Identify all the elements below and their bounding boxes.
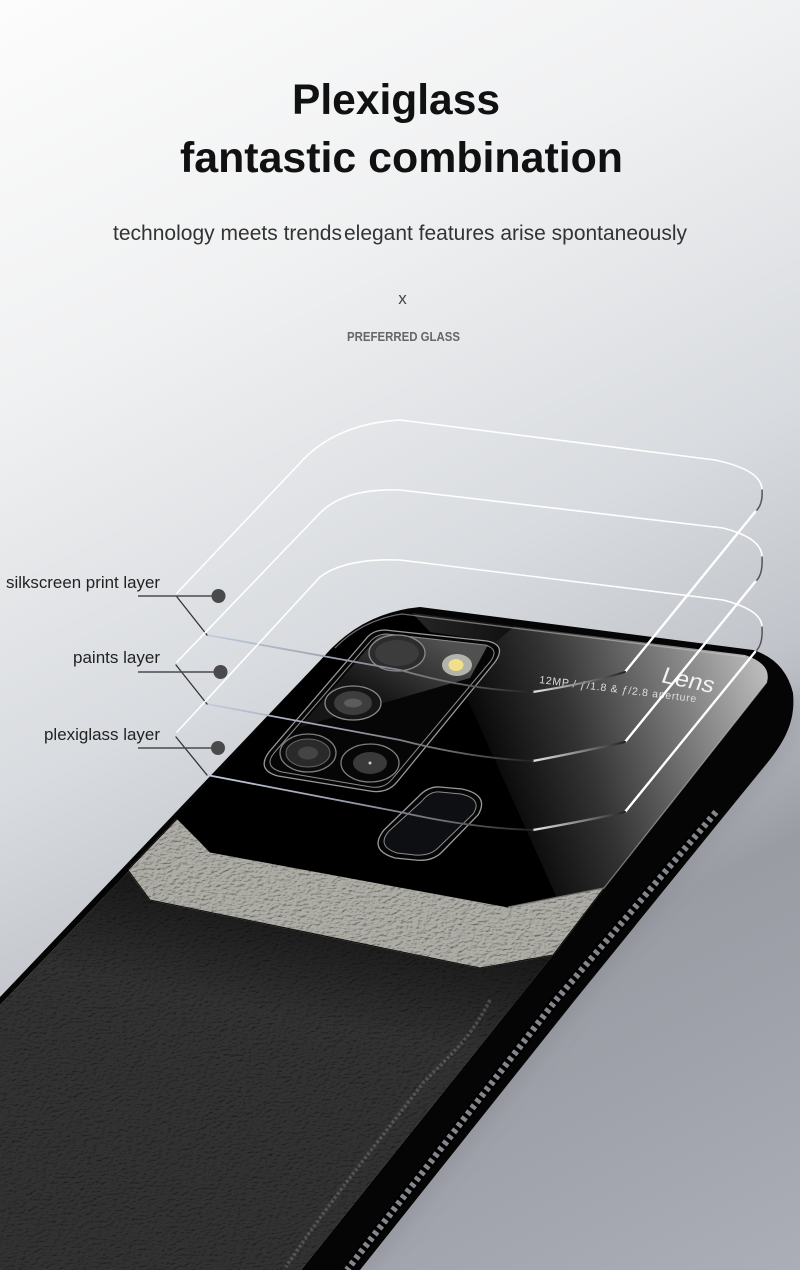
pane: plexiglass layer bbox=[176, 560, 762, 830]
callout: paints layer bbox=[73, 648, 228, 679]
pane: silkscreen print layer bbox=[177, 420, 762, 692]
title: fantastic combination bbox=[180, 134, 623, 182]
title bbox=[180, 76, 623, 182]
subtitle: technology meets trends bbox=[113, 221, 342, 245]
camera module bbox=[264, 630, 500, 792]
small caption: preferred glass: PREFERRED GLASS bbox=[347, 330, 460, 344]
case shadow bbox=[360, 693, 793, 1270]
callout: paints layer: paints layer bbox=[73, 648, 160, 667]
fingerprint sensor bbox=[378, 787, 482, 860]
leather back bbox=[0, 872, 553, 1270]
callout: plexiglass layer: plexiglass layer bbox=[44, 725, 160, 744]
callout: plexiglass layer bbox=[44, 725, 225, 755]
title: Plexiglass bbox=[292, 76, 500, 124]
module gloss bbox=[300, 634, 488, 727]
black facet of glass bbox=[176, 612, 556, 907]
subtitle: elegant features arise spontaneously bbox=[344, 221, 687, 245]
callout: silkscreen print layer: silkscreen print layer bbox=[6, 573, 160, 592]
glass rim highlight bbox=[335, 614, 767, 907]
lens 1 bbox=[369, 635, 425, 671]
lens 2 bbox=[325, 686, 381, 720]
phone case bbox=[0, 607, 793, 1270]
lens print: 12MP / ƒ/1.8 & ƒ/2.8 aperture bbox=[539, 674, 697, 705]
lens 4 bbox=[341, 744, 399, 782]
pane: paints layer bbox=[176, 490, 762, 761]
flash bbox=[442, 654, 472, 676]
gray leather band bbox=[128, 818, 604, 968]
side grip dots bbox=[347, 812, 716, 1270]
lens 3 bbox=[280, 734, 336, 772]
top facet of glass bbox=[412, 613, 515, 642]
multiply mark: x bbox=[398, 289, 407, 308]
subtitle bbox=[113, 221, 687, 245]
glass layer lines bbox=[176, 420, 762, 830]
black bumper bbox=[0, 607, 793, 1270]
lens print bbox=[539, 662, 719, 705]
callout: silkscreen print layer bbox=[6, 573, 226, 603]
lens print: Lens bbox=[658, 662, 719, 698]
shadow under band bbox=[0, 872, 553, 1060]
glass panel bbox=[176, 612, 768, 907]
stitched highlight bbox=[286, 1000, 490, 1267]
